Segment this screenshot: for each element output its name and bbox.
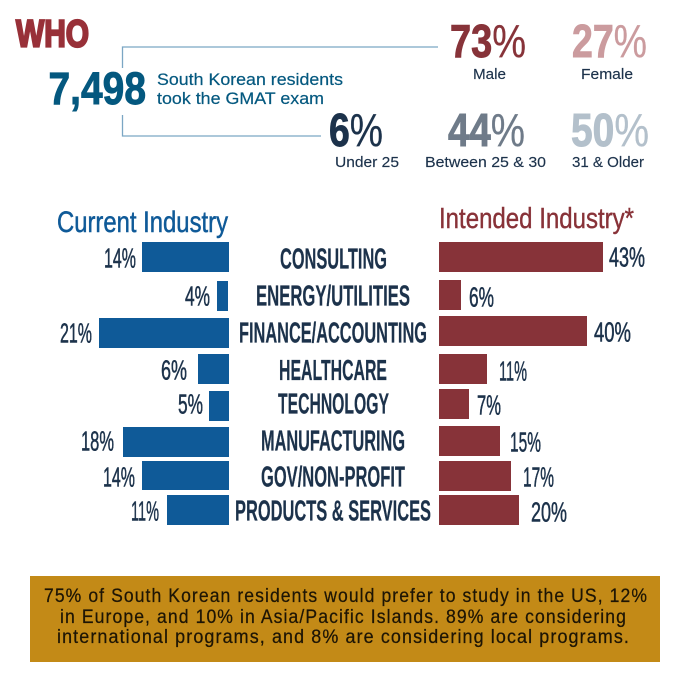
gender stat: 73% male: 73% [450,15,526,67]
industry category labels: ENERGY/UTILITIES [256,280,410,312]
number: 7,498: 7,498 [48,63,146,114]
bar: technology current [209,391,229,421]
callout text: in Europe, and 10% in Asia/Pacific Islands. 89% are considering [60,606,627,628]
intended industry percentages [469,242,645,528]
description: South Korean residents took the GMAT exam: took the GMAT exam [157,90,324,108]
age stat: 44% between 25 and 30: Between 25 & 30 [425,154,546,171]
gender stat: 73% male: Male [473,66,506,83]
industry category labels: HEALTHCARE [279,355,387,387]
current industry percentages: 6% [161,354,187,386]
intended industry percentages: 17% [523,462,554,492]
bar: energy intended [439,280,461,310]
intended industry percentages: 40% [594,316,631,348]
current industry percentages: 4% [185,280,210,312]
description: South Korean residents took the GMAT exam: South Korean residents [157,71,343,89]
callout background [30,576,660,662]
bar: manufacturing current [123,427,229,457]
bar: finance intended [439,316,587,346]
industry category labels: FINANCE/ACCOUNTING [239,318,427,350]
intended industry percentages: 11% [499,356,527,386]
intended industry percentages: 20% [531,496,567,528]
intended industry percentages: 7% [477,390,501,420]
age stat: 6% under 25 [329,104,399,171]
age stat: 44% between 25 and 30 [425,104,546,171]
heading: Current Industry: Current Industry [57,206,228,239]
current industry percentages [60,242,210,526]
intended industry percentages: 6% [469,282,494,312]
bar: manufacturing intended [439,426,500,456]
bar: finance current [99,318,229,348]
industry category labels: MANUFACTURING [261,426,405,458]
description: South Korean residents took the GMAT exam [157,71,343,108]
gender stat: 27% female: 27% [572,15,647,67]
age stat: 50% 31 and older: 50% [571,104,649,156]
industry category labels: CONSULTING [280,244,387,276]
callout text: international programs, and 8% are considering local programs. [57,626,630,648]
current industry percentages: 14% [103,462,135,492]
headline stat: 7,498 test takers [48,63,343,114]
callout: study preferences [30,576,660,662]
industry category labels: GOV/NON-PROFIT [261,462,405,494]
industry category labels [235,244,431,528]
bar: consulting current [142,242,229,272]
heading: WHO: WHO [16,14,89,56]
bar: healthcare intended [439,354,487,384]
industry category labels: PRODUCTS & SERVICES [235,496,431,528]
bar: consulting intended [439,242,603,272]
bar: energy current [217,281,228,311]
gender stat: 27% female: Female [581,66,633,83]
bar chart: current industry [99,242,229,525]
current industry percentages: 11% [131,496,159,526]
bar: technology intended [439,389,469,419]
bar: government current [142,461,229,490]
bar: products current [167,495,229,525]
bar: products intended [439,495,519,525]
age stat: 6% under 25: Under 25 [335,154,399,171]
age stat: 50% 31 and older: 31 & Older [572,154,644,171]
current industry percentages: 14% [104,242,136,274]
age stat: 44% between 25 and 30: 44% [448,104,525,156]
bracket connector lines [122,47,438,136]
current industry percentages: 21% [60,318,92,348]
bar: healthcare current [198,354,229,384]
bar chart: intended industry [439,242,603,525]
industry category labels: TECHNOLOGY [278,388,389,420]
current industry percentages: 5% [178,388,203,420]
intended industry percentages: 43% [609,242,645,272]
intended industry percentages: 15% [510,426,541,458]
bar: government intended [439,461,511,491]
age stat: 6% under 25: 6% [329,104,383,156]
callout text [44,585,648,648]
heading: Intended Industry: Intended Industry* [439,203,634,235]
current industry percentages: 18% [81,426,114,456]
